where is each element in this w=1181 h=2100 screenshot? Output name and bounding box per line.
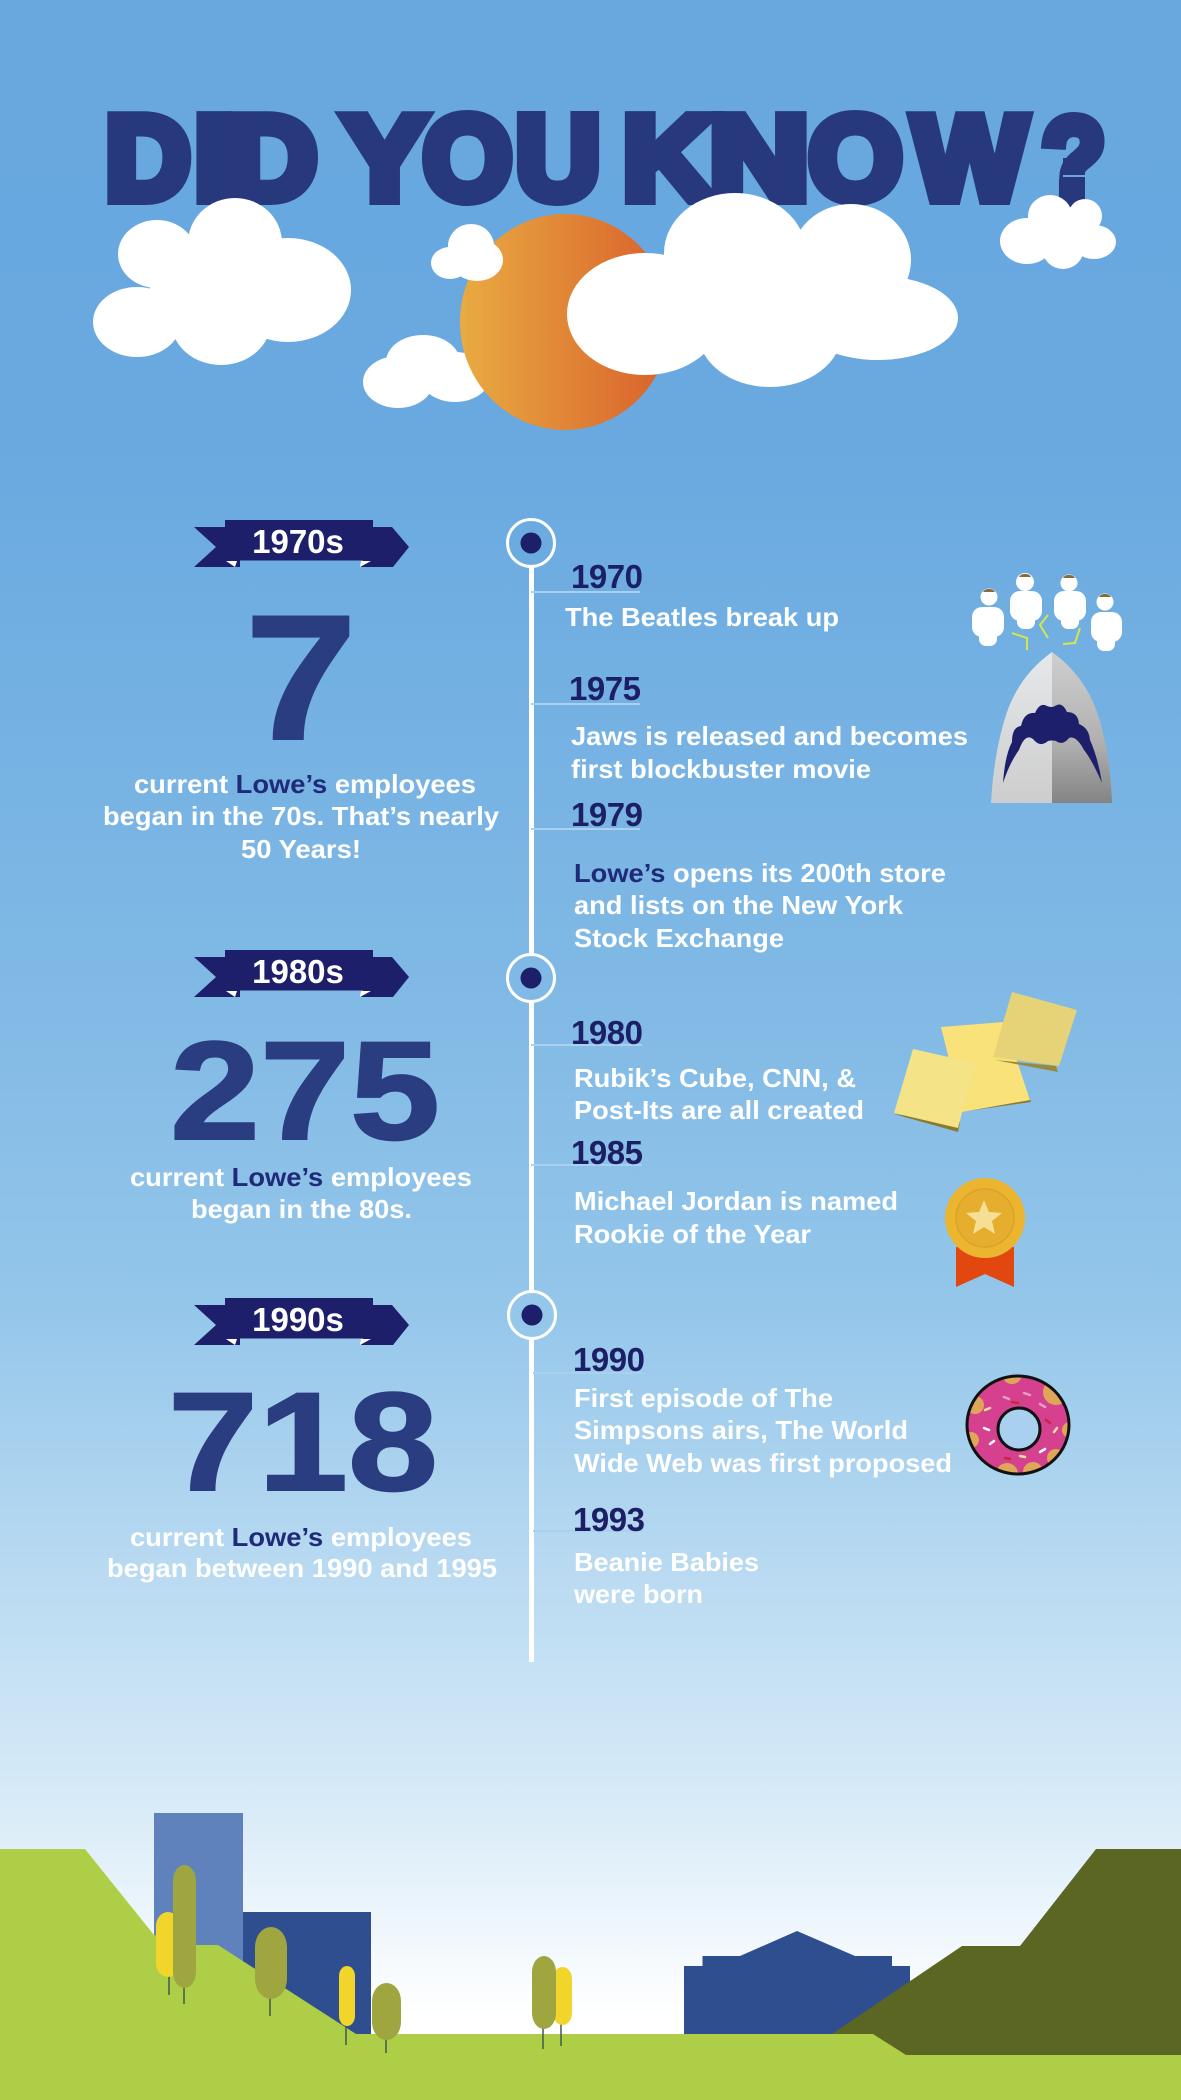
- event: 1985: [531, 1134, 898, 1249]
- building: store with pitched roof: [684, 1931, 910, 2034]
- event: 1975: 1975: [569, 670, 641, 707]
- stat caption: 1990s: current Lowe’s employees: [130, 1522, 472, 1552]
- building: tall light blue: [154, 1813, 243, 1973]
- timeline marker 1970s: [508, 520, 554, 566]
- stat: 718: 718: [168, 1363, 438, 1520]
- event: 1970: [531, 558, 839, 632]
- ribbon: 1980s: [194, 950, 409, 997]
- timeline spine: [529, 543, 534, 1662]
- event: 1975: first blockbuster movie: [571, 754, 871, 784]
- event: 1980: 1980: [571, 1014, 643, 1051]
- building: navy block: [243, 1912, 371, 2034]
- title: I: [194, 92, 235, 225]
- event: 1979: [531, 796, 946, 953]
- event: 1985: Michael Jordan is named: [574, 1186, 898, 1216]
- cloud: lower left of sun: [363, 335, 490, 408]
- title: D: [228, 92, 317, 225]
- event: 1990: Simpsons airs, The World: [574, 1415, 908, 1445]
- title: W: [913, 92, 1027, 225]
- title: ?: [1042, 94, 1105, 227]
- ribbon: 1990s: [194, 1298, 409, 1345]
- event: 1979: 1979: [571, 796, 643, 833]
- event: 1980: [531, 1014, 864, 1125]
- ribbon: 1970s: 1970s: [252, 523, 344, 560]
- icon: pink donut: [966, 1374, 1070, 1476]
- stat caption: 1980s: [130, 1162, 472, 1224]
- ribbon: 1970s: [194, 520, 409, 567]
- title: K: [623, 92, 714, 225]
- icon: Beatles band members: [972, 573, 1122, 651]
- event: 1985: 1985: [571, 1134, 643, 1171]
- event: 1979: Lowe’s opens its 200th store: [574, 858, 946, 888]
- title: D: [105, 92, 190, 225]
- icon: gold medal: [945, 1178, 1025, 1287]
- stat caption: 1970s: began in the 70s. That’s nearly: [103, 801, 500, 831]
- icon: sticky notes: [894, 992, 1077, 1132]
- stat caption: 1970s: [103, 769, 500, 864]
- stat caption: 1990s: [107, 1522, 497, 1583]
- stat caption: 1970s: current Lowe’s employees: [134, 769, 476, 799]
- event: 1970: 1970: [571, 558, 643, 595]
- cloud: small above sun: [431, 224, 503, 281]
- stat: 275: 275: [170, 1012, 440, 1169]
- ground and left hill: [0, 1849, 1181, 2100]
- event: 1979: Stock Exchange: [574, 923, 784, 953]
- event: 1979: and lists on the New York: [574, 890, 904, 920]
- stat caption: 1980s: began in the 80s.: [191, 1194, 412, 1224]
- title: N: [709, 92, 809, 225]
- event: 1990: 1990: [573, 1341, 645, 1378]
- cloud: left large: [93, 198, 351, 365]
- event: 1985: Rookie of the Year: [574, 1219, 811, 1249]
- event: 1993: were born: [573, 1579, 703, 1609]
- title: [105, 92, 1105, 227]
- timeline marker 1990s: [508, 1292, 556, 1338]
- cloud: big right: [567, 193, 958, 387]
- ribbon: 1980s: 1980s: [252, 953, 344, 990]
- event: 1975: Jaws is released and becomes: [571, 721, 968, 751]
- cloud: top right small: [1000, 195, 1116, 269]
- event: 1980: Rubik’s Cube, CNN, &: [574, 1063, 856, 1093]
- event: 1970: The Beatles break up: [565, 602, 839, 632]
- title: O: [423, 92, 512, 225]
- event: 1993: [533, 1501, 759, 1609]
- event: 1990: Wide Web was first proposed: [574, 1448, 952, 1478]
- event: 1975: [531, 670, 968, 784]
- sun: [460, 214, 670, 430]
- event: 1990: First episode of The: [574, 1383, 833, 1413]
- event: 1993: 1993: [573, 1501, 645, 1538]
- icon: shark fin with jaws: [991, 652, 1112, 803]
- title: Y: [343, 92, 426, 225]
- stat: 7: 7: [245, 578, 357, 777]
- right dark hill: [832, 1849, 1181, 2055]
- title: O: [809, 92, 902, 225]
- stat caption: 1990s: began between 1990 and 1995: [107, 1553, 497, 1583]
- event: 1980: Post-Its are all created: [574, 1095, 864, 1125]
- title: U: [516, 92, 600, 225]
- event: 1993: Beanie Babies: [574, 1547, 759, 1577]
- stat caption: 1980s: current Lowe’s employees: [130, 1162, 472, 1192]
- trees: [156, 1865, 572, 2053]
- ribbon: 1990s: 1990s: [252, 1301, 344, 1338]
- timeline marker 1980s: [508, 954, 554, 1002]
- event: 1990: [533, 1341, 952, 1478]
- stat caption: 1970s: 50 Years!: [241, 834, 361, 864]
